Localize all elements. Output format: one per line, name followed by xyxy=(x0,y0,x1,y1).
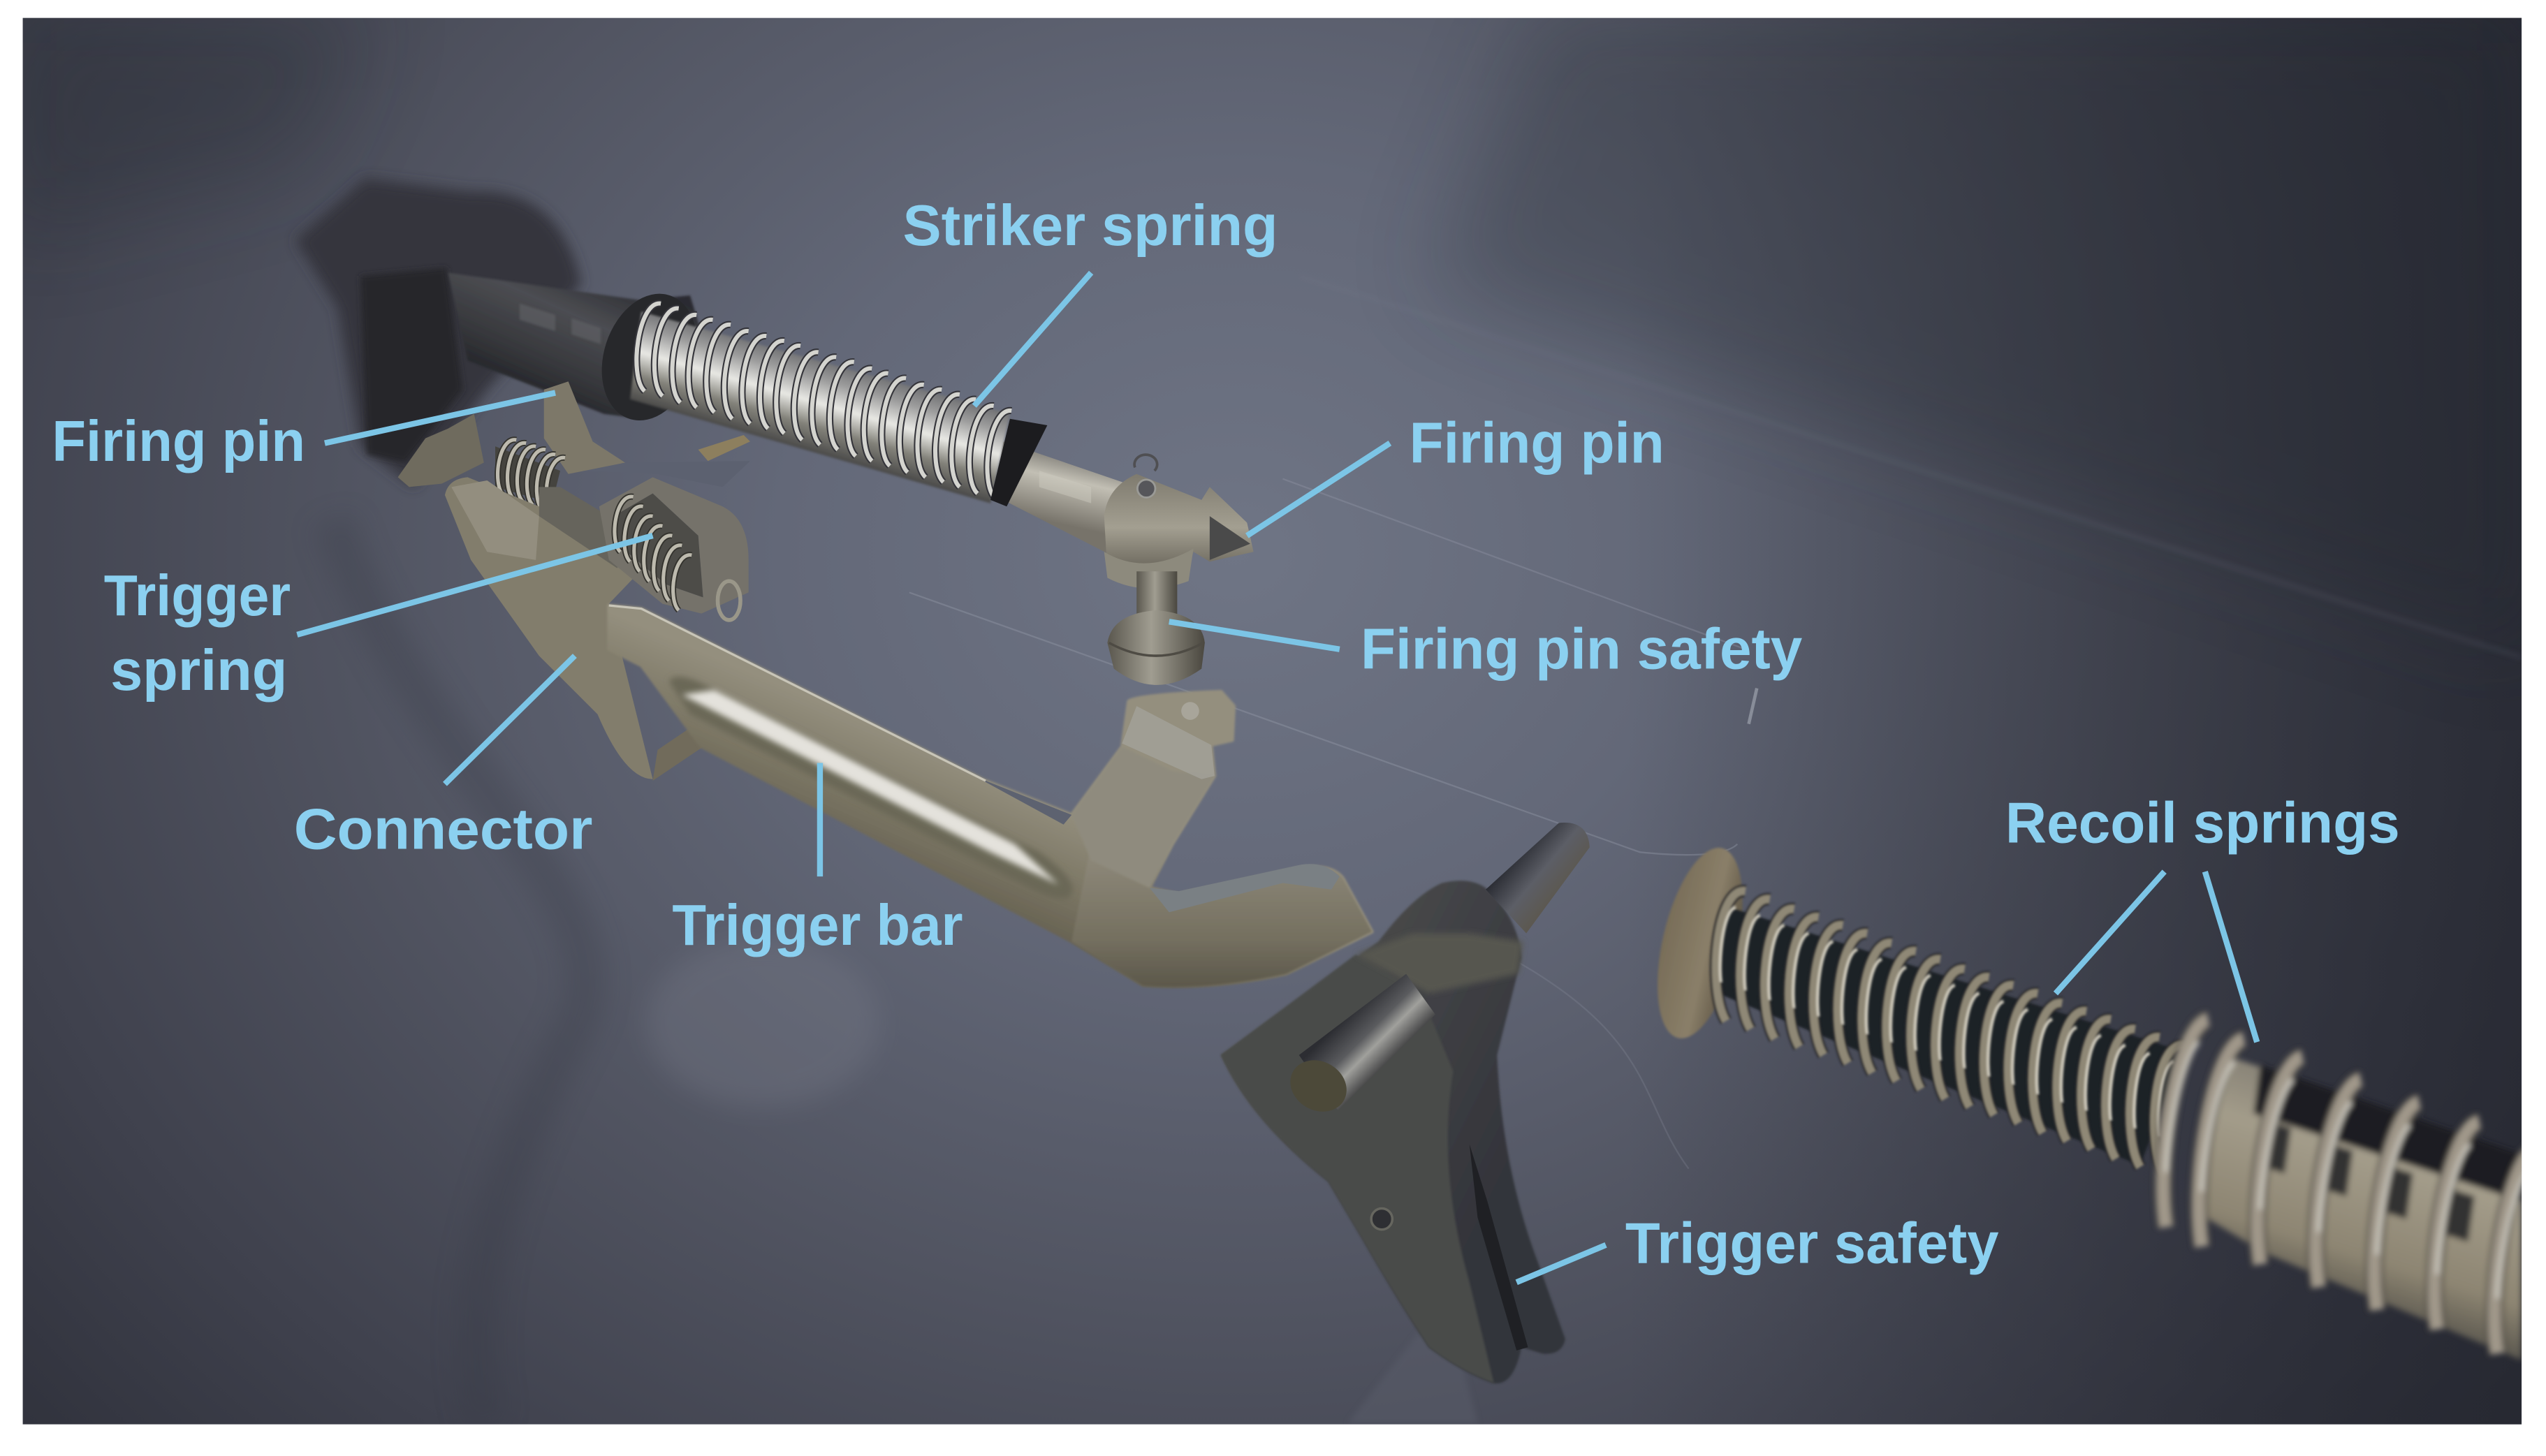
trigger pins xyxy=(1281,823,1590,1122)
inner spring coils xyxy=(1716,891,2184,1175)
ghost frame silhouette xyxy=(319,293,2253,1419)
trigger mechanism xyxy=(398,381,1590,1383)
label: Firing pin right xyxy=(1247,411,1665,536)
label: Trigger safety: Trigger safety xyxy=(1625,1211,1999,1275)
label: Trigger spring: spring xyxy=(110,638,287,703)
spring cup and loop xyxy=(599,477,749,620)
label: Firing pin left: Firing pin xyxy=(52,409,305,473)
recoil springs xyxy=(1641,840,2540,1360)
label: Trigger spring: Trigger xyxy=(104,564,291,628)
firing pin safety xyxy=(1107,571,1205,685)
label: Firing pin left xyxy=(52,393,555,473)
upper frame tabs xyxy=(398,381,750,487)
label: Recoil springs: Recoil springs xyxy=(2005,790,2400,855)
label: Trigger safety xyxy=(1516,1211,1999,1282)
label: Trigger bar: Trigger bar xyxy=(672,893,963,957)
label: Firing pin right: Firing pin xyxy=(1410,411,1665,475)
label: Firing pin safety: Firing pin safety xyxy=(1361,617,1802,682)
label: Striker spring: Striker spring xyxy=(902,193,1278,258)
label: Connector: Connector xyxy=(294,797,592,862)
outer spring xyxy=(2163,1020,2540,1360)
striker assembly xyxy=(295,179,1254,685)
connector xyxy=(445,477,722,781)
label: Recoil springs xyxy=(2005,790,2400,1042)
label: Firing pin safety xyxy=(1169,617,1802,682)
striker rod and collar xyxy=(994,441,1136,560)
flange xyxy=(1641,840,1758,1046)
trigger bar xyxy=(609,605,1372,987)
inner spring core xyxy=(1718,906,2184,1165)
small spring xyxy=(495,440,565,513)
striker spring xyxy=(630,304,1011,503)
striker rear housing xyxy=(295,179,712,487)
trigger xyxy=(1221,823,1590,1383)
label: Trigger spring xyxy=(104,536,652,703)
label: Striker spring xyxy=(902,193,1278,406)
label: Connector xyxy=(294,656,592,862)
firing pin head xyxy=(1104,455,1254,589)
